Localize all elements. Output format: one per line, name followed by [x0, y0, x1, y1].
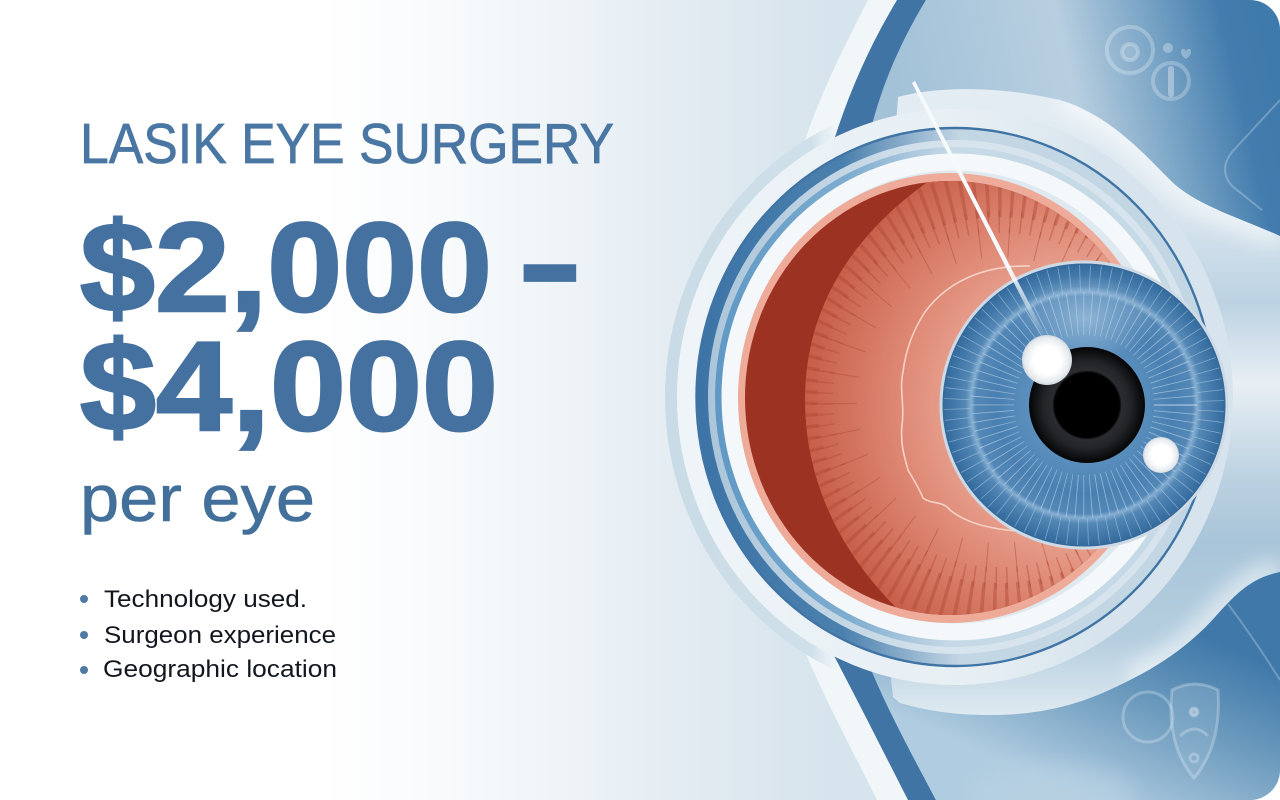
outer pale ring — [665, 127, 836, 667]
radial fibres — [805, 181, 1110, 615]
ring: inner white — [730, 162, 1180, 632]
price line one: $2,000 — [80, 196, 492, 338]
upper sclera area — [872, 0, 1280, 260]
price line two: $4,000 — [80, 315, 498, 457]
iris — [941, 262, 1227, 548]
sclera highlight — [1063, 770, 1126, 800]
light reflection large — [1022, 335, 1072, 385]
pupil — [1029, 347, 1145, 463]
salmon rim — [738, 173, 1162, 623]
eyelid shape — [860, 89, 1280, 715]
retina: salmon area with radial fibres — [805, 181, 1110, 615]
iris fibres — [957, 278, 1211, 532]
laser needle — [912, 81, 1047, 340]
lower sclera area — [872, 560, 1280, 800]
ring: mid blue — [718, 150, 1192, 644]
retina: dark red area — [745, 181, 1110, 615]
ring: thin dark line — [696, 128, 1214, 666]
background panel — [459, 0, 1280, 800]
ring: inner disc backing — [703, 135, 1207, 659]
bullet: technology: Technology used. — [104, 586, 307, 613]
retinal wavy line — [902, 266, 1045, 532]
bullet: location: Geographic location — [103, 656, 337, 683]
price dash: - — [518, 191, 582, 333]
price range — [80, 216, 576, 451]
salmon fill — [805, 181, 1110, 615]
light reflection small — [1143, 437, 1179, 473]
title: LASIK EYE SURGERY — [80, 112, 614, 176]
panel: eye illustration — [671, 0, 1280, 800]
bullet list — [80, 586, 337, 683]
per eye label: per eye — [80, 461, 315, 535]
bullet: surgeon: Surgeon experience — [104, 622, 336, 649]
icon: top corner faint symbols — [1107, 27, 1280, 210]
iris disc — [941, 262, 1227, 548]
dark blue outer band — [832, 0, 936, 800]
ring: white — [687, 119, 1223, 675]
ring: grey-blue — [712, 144, 1198, 650]
white outer band — [805, 0, 910, 800]
eyelid edge highlight — [1060, 100, 1280, 680]
icon: bottom corner faint symbols — [1123, 604, 1280, 778]
iris top glow — [1025, 281, 1147, 351]
